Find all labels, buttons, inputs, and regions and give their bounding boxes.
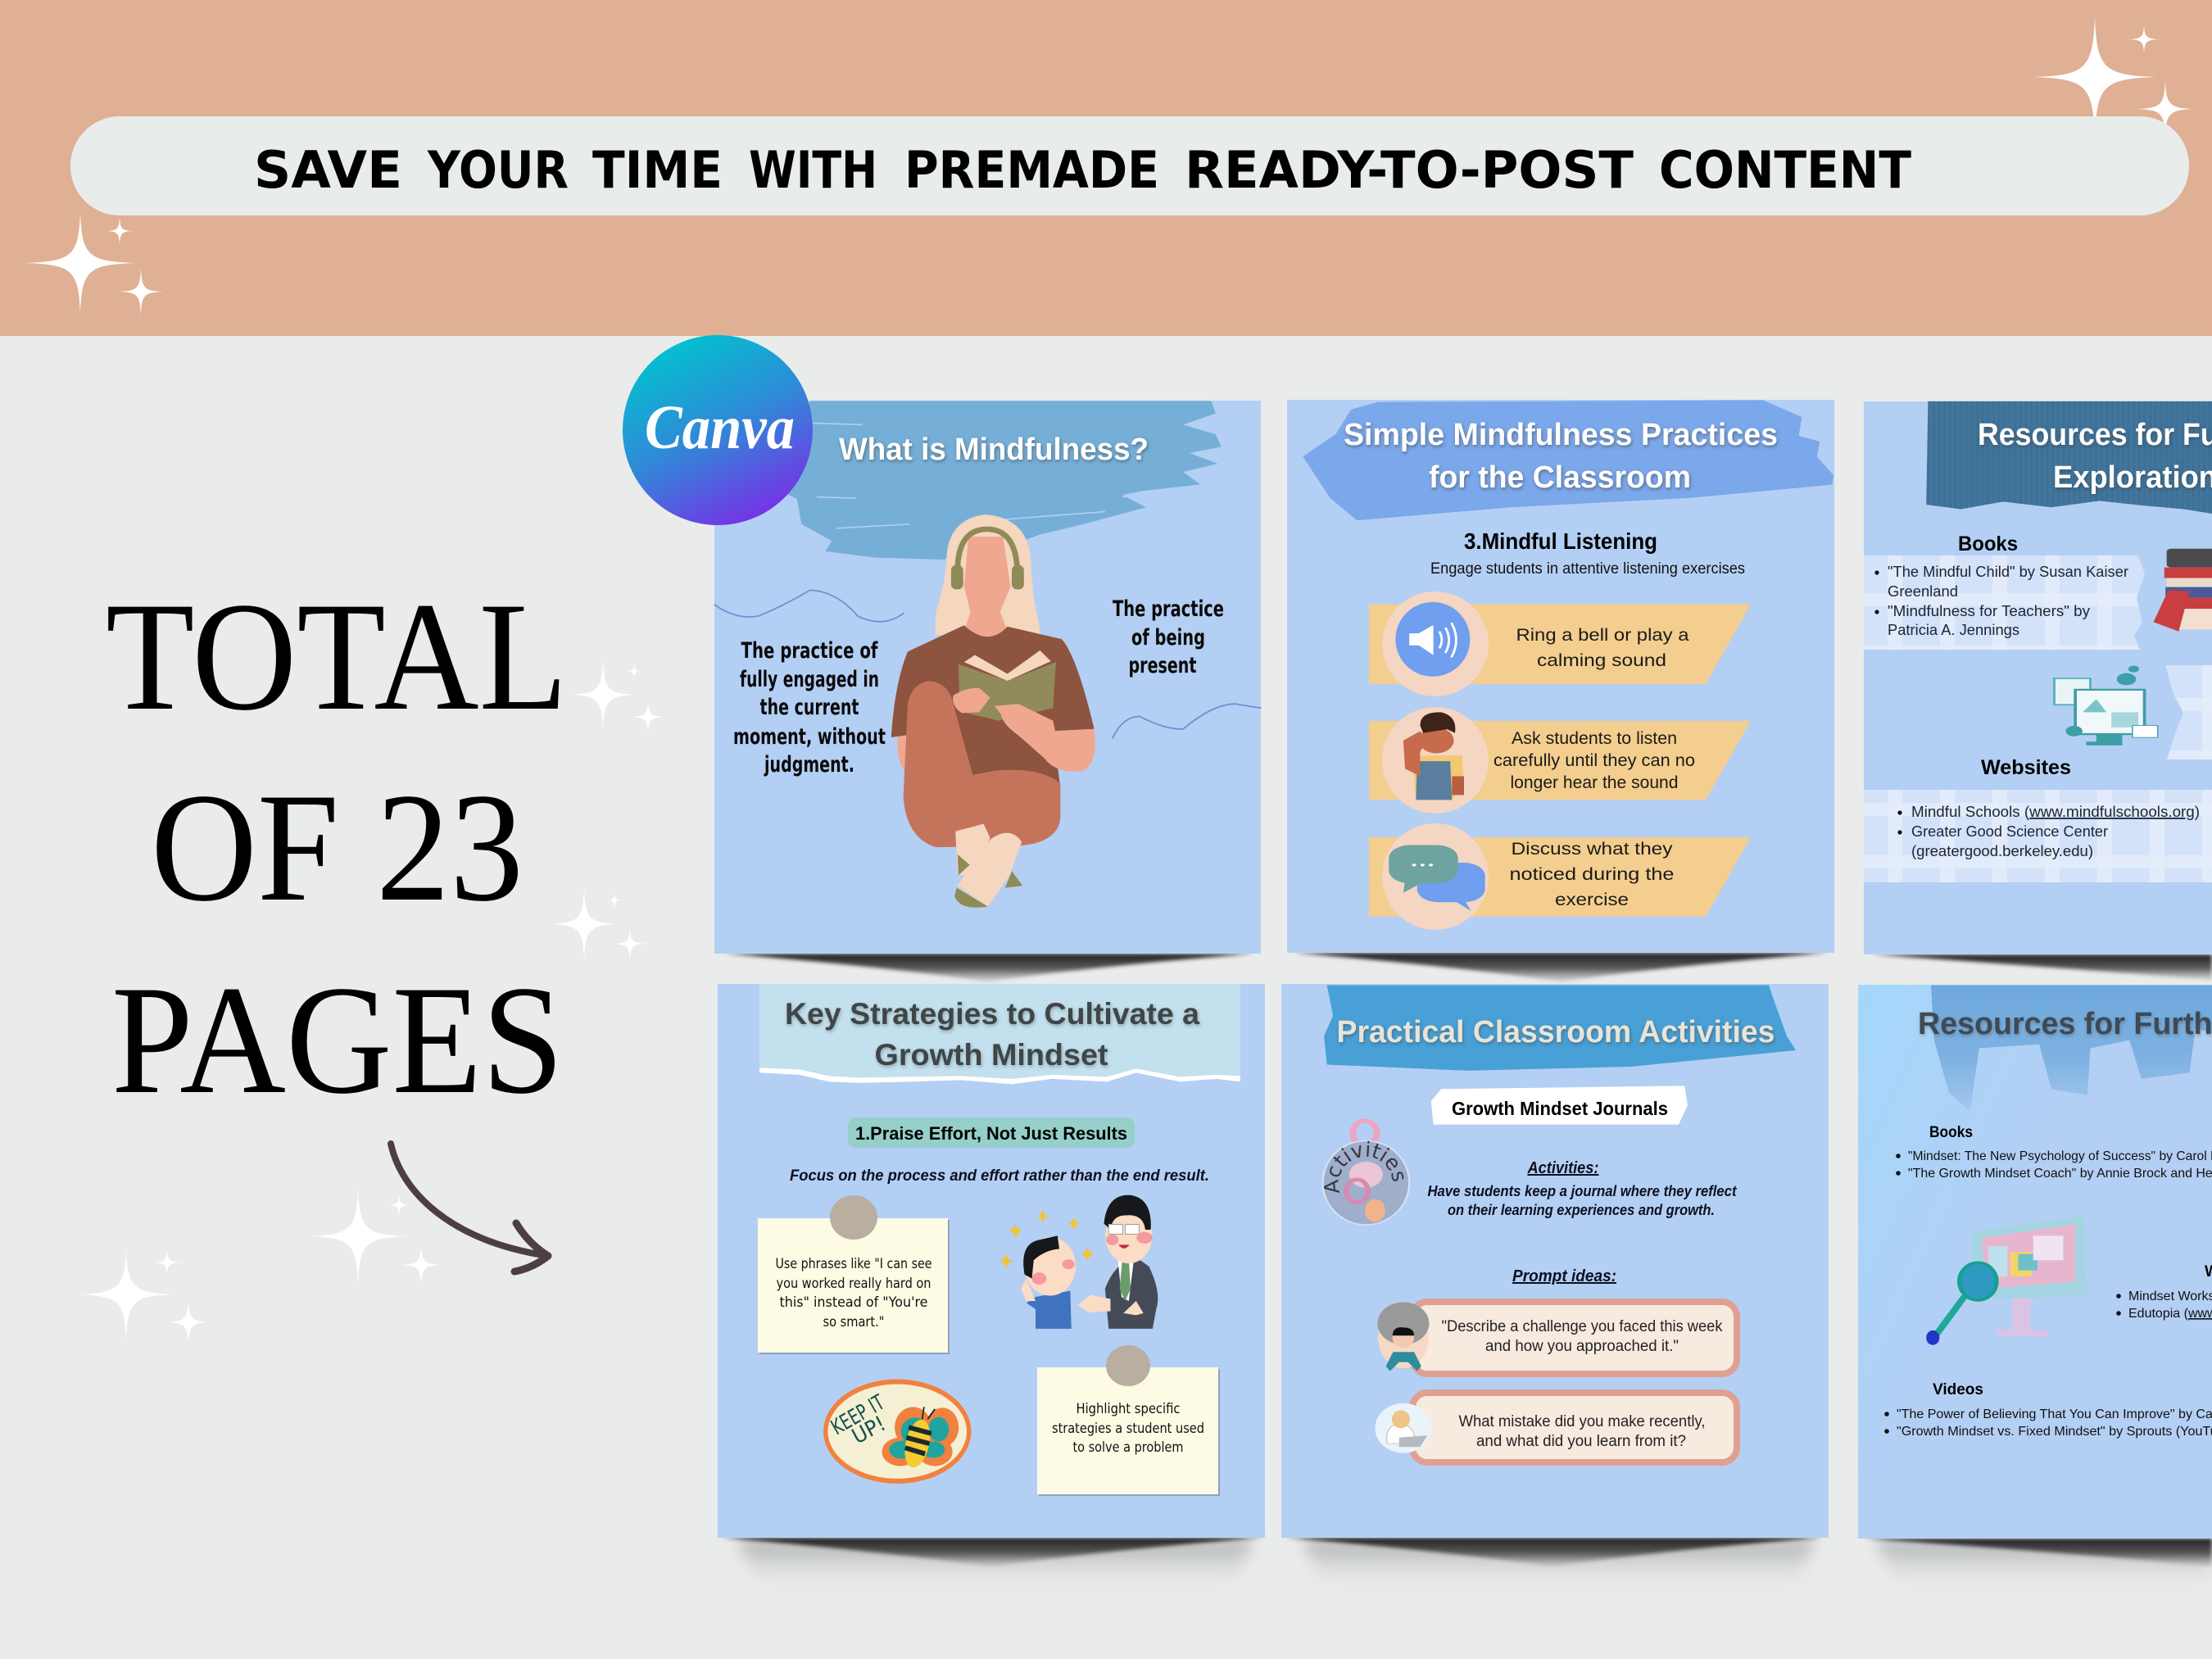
left column sparkles (77, 658, 666, 1345)
illustration: teacher praising boy (999, 1195, 1158, 1329)
prompt box 1: and how you approached it." (1485, 1338, 1679, 1355)
title (785, 997, 1199, 1072)
torn paper header (759, 984, 1240, 1084)
prompt box 1 (1377, 1302, 1737, 1374)
plaid band: books (1864, 555, 2145, 650)
brush stroke header (780, 401, 1222, 560)
title (1344, 418, 1778, 495)
subheading: growth mindset journals (1431, 1086, 1688, 1125)
prompt box 1: "Describe a challenge you faced this week (1442, 1318, 1723, 1335)
icon: website dashboard (2054, 665, 2158, 746)
title text: TIME (592, 140, 723, 200)
title text: PREMADE (904, 140, 1159, 200)
title text: CONTENT (1659, 140, 1911, 200)
row 1: bell (1369, 592, 1751, 696)
text: left definition: fully engaged in (740, 667, 879, 692)
subheading pill (848, 1117, 1135, 1148)
brush stroke header (1324, 985, 1796, 1071)
sticker: keep it up butterfly: UP! (848, 1412, 890, 1449)
title text: YOUR (427, 140, 569, 200)
prompt box 2: and what did you learn from it? (1476, 1433, 1686, 1450)
icon: boy lifting boulder (1377, 1302, 1429, 1371)
badge: activities: Activities (1324, 1140, 1404, 1193)
text (1516, 626, 1689, 670)
sticky note 1: this" instead of "You're (780, 1294, 927, 1311)
books list: "The Mindful Child" by Susan Kaiser (1888, 564, 2128, 580)
heading: books: Books (1929, 1124, 1973, 1141)
text: right definition: The practice (1113, 596, 1224, 622)
illustration: woman reading with headphones (891, 514, 1095, 908)
title: What is Mindfulness? (839, 433, 1149, 467)
sticky note 2: strategies a student used (1052, 1421, 1204, 1437)
row 2: listening student (1369, 707, 1751, 814)
brush stroke header (1303, 400, 1834, 520)
header band (0, 0, 2212, 336)
text (1494, 729, 1695, 792)
slide shadows (721, 953, 2212, 1593)
subheading: growth mindset journals: Growth Mindset Journals (1452, 1098, 1668, 1119)
sticky note 1: Use phrases like "I can see (775, 1256, 932, 1272)
sticky note 2: to solve a problem (1073, 1439, 1183, 1456)
sticker: keep it up butterfly: KEEP IT (827, 1390, 889, 1440)
heading: total of 23 pages (106, 571, 568, 1126)
websites list: Mindful Schools ( www.mindfulschools.org ) (1911, 804, 2200, 820)
sparkles: top right (2033, 16, 2194, 138)
badge: activities (1322, 1118, 1411, 1226)
panel: what is mindfulness (714, 401, 1261, 954)
text: left definition (733, 638, 886, 777)
sticky note 1: so smart." (823, 1314, 885, 1330)
title bar (70, 116, 2189, 215)
heading: books: Books (1958, 533, 2018, 555)
text (1509, 840, 1675, 909)
wavy lines (714, 590, 1261, 739)
panel: simple mindfulness practices (1287, 400, 1834, 953)
icon: stressed worker (1375, 1403, 1431, 1453)
subheading: 3.Mindful Listening (1464, 528, 1657, 554)
title text: READY-TO-POST (1185, 140, 1634, 200)
title: Growth Mindset (875, 1038, 1108, 1072)
panel: resources for further exploration (1864, 401, 2212, 954)
text: Ring a bell or play a (1516, 626, 1689, 645)
icon: speech bubbles (1389, 845, 1485, 911)
books list (1874, 564, 2128, 638)
heading: total of 23 pages: PAGES (111, 954, 564, 1126)
heading: websites: Websites (1981, 756, 2071, 779)
illustration: monitor with magnifier (1926, 1216, 2087, 1345)
activities text (1427, 1159, 1737, 1218)
brush drips header (1931, 985, 2212, 1112)
title: for the Classroom (1429, 460, 1691, 495)
description: Engage students in attentive listening exercises (1430, 560, 1745, 578)
heading: total of 23 pages: TOTAL (106, 571, 568, 743)
subheading pill: 1.Praise Effort, Not Just Results (855, 1123, 1127, 1144)
icon: student cupping ear (1403, 712, 1464, 800)
title: Simple Mindfulness Practices (1344, 418, 1778, 452)
websites list: Greater Good Science Center (1911, 823, 2108, 840)
sticky note 1: you worked really hard on (777, 1276, 931, 1292)
panel: resources for further (1858, 985, 2212, 1539)
panel: key strategies growth mindset (718, 984, 1265, 1538)
title text: SAVE (254, 140, 402, 200)
sticky note 2: Highlight specific (1077, 1401, 1180, 1417)
books list: Patricia A. Jennings (1888, 622, 2019, 638)
plaid band: websites (1864, 790, 2212, 882)
arrow (391, 1144, 548, 1271)
text: noticed during the (1509, 865, 1675, 884)
activities text: Have students keep a journal where they reflect (1427, 1183, 1737, 1199)
text: Discuss what they (1511, 840, 1673, 859)
text: exercise (1555, 891, 1629, 909)
books list: "Mindfulness for Teachers" by (1888, 603, 2090, 619)
focus line: Focus on the process and effort rather than the end result. (790, 1167, 1209, 1185)
websites list (1897, 804, 2200, 859)
text: left definition: moment, without (733, 724, 886, 750)
text: longer hear the sound (1511, 773, 1678, 792)
books list (1896, 1149, 2212, 1181)
plaid band fragment (2165, 665, 2212, 759)
title (1978, 418, 2212, 495)
sticky note 1 (758, 1195, 950, 1354)
heading: total of 23 pages: OF 23 (151, 762, 524, 934)
websites list: (greatergood.berkeley.edu) (1911, 843, 2093, 859)
sparkles: lower left (25, 212, 163, 316)
canva logo: Canva (645, 393, 795, 462)
icon: stack of books (2154, 549, 2212, 632)
text: left definition: The practice of (741, 638, 878, 664)
sticky note 2 (1037, 1345, 1220, 1496)
videos list (1884, 1407, 2212, 1439)
text: left definition: the current (760, 695, 859, 720)
text: left definition: judgment. (764, 752, 854, 777)
torn paper header (1926, 401, 2212, 514)
title text: WITH (749, 140, 877, 200)
text: calming sound (1537, 651, 1666, 670)
title: Practical Classroom Activities (1337, 1015, 1775, 1049)
activities text: Activities: (1527, 1159, 1599, 1177)
heading: videos: Videos (1933, 1381, 1983, 1398)
activities text: on their learning experiences and growth. (1448, 1202, 1715, 1218)
text: Ask students to listen (1512, 729, 1677, 748)
text: right definition: of being (1131, 625, 1205, 650)
icon: speaker (1395, 602, 1470, 677)
books list: Greenland (1888, 583, 1958, 600)
websites list (clipped) (2116, 1290, 2212, 1321)
panel: practical classroom activities (1281, 984, 1829, 1538)
text: right definition (1113, 596, 1224, 678)
title: Key Strategies to Cultivate a (785, 997, 1199, 1031)
title text (254, 140, 1911, 200)
sticker: keep it up butterfly (826, 1382, 969, 1481)
canva logo (623, 335, 813, 525)
text: right definition: present (1129, 653, 1197, 678)
prompt box 2: What mistake did you make recently, (1458, 1413, 1706, 1430)
text: carefully until they can no (1494, 751, 1695, 770)
row 3: discussion (1369, 823, 1751, 930)
prompt ideas heading: Prompt ideas: (1512, 1267, 1616, 1285)
prompt box 2 (1375, 1393, 1737, 1462)
